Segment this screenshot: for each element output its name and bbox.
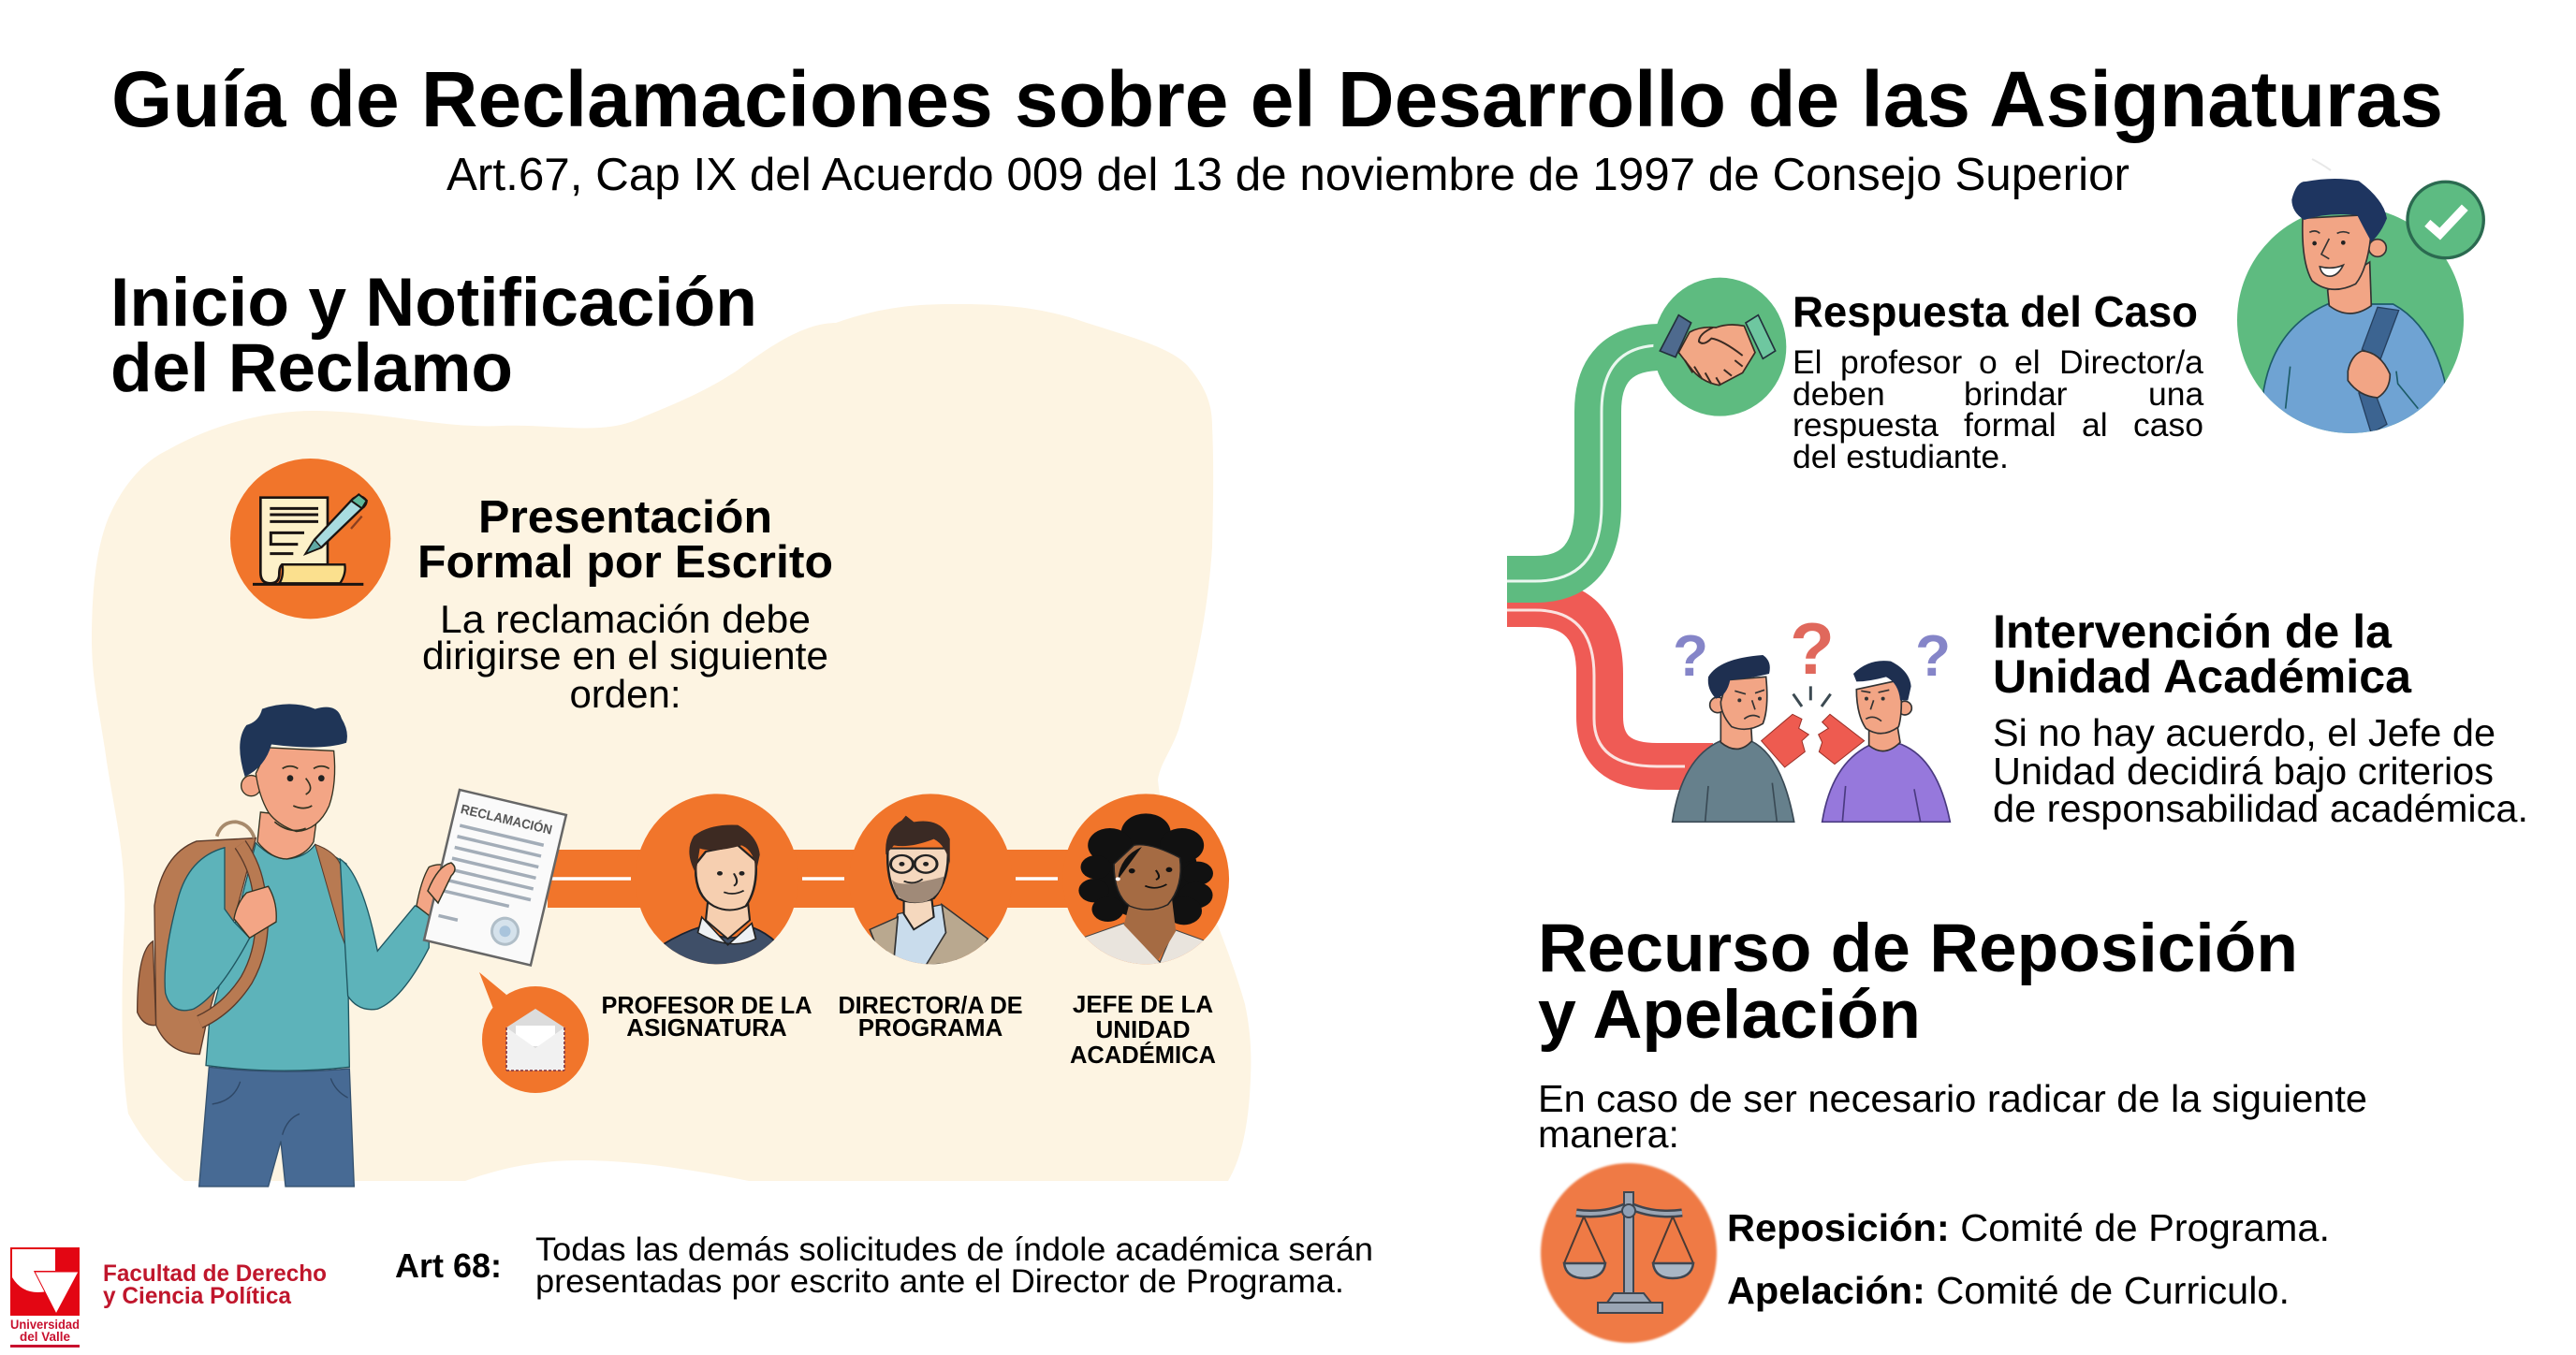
label: jefe: UNIDAD	[1095, 1015, 1191, 1043]
hand holding document	[417, 865, 451, 915]
icon: written document and pen	[230, 459, 390, 619]
reclamation document	[424, 790, 566, 965]
text: orden de la reclamación: dirigirse en el siguiente	[422, 634, 828, 678]
branching path: red route	[1507, 604, 1713, 766]
student with check mark	[2237, 159, 2483, 440]
section heading: recurso: Recurso de Reposición	[1538, 911, 2298, 986]
cream background blob	[92, 304, 1251, 1181]
heading: intervención	[1993, 605, 2412, 703]
text: orden de la reclamación	[422, 597, 828, 716]
speech shards	[1762, 714, 1865, 767]
text: instrucción	[1538, 1077, 2367, 1156]
section heading: inicio y notificación: del Reclamo	[110, 330, 513, 406]
text: respuesta: El	[1793, 343, 1822, 381]
text: respuesta: el	[2014, 343, 2041, 381]
heading: intervención: Intervención de la	[1993, 605, 2393, 658]
text: respuesta: o	[1979, 343, 1998, 381]
icon: envelope speech bubble	[479, 972, 589, 1093]
article 68 text: presentadas por escrito ante el Director de Programa.	[535, 1263, 1344, 1300]
conflict sparks	[1793, 686, 1831, 707]
icon: head of unit	[1062, 794, 1229, 967]
faculty name: Facultad de Derecho	[103, 1260, 327, 1287]
faculty name: y Ciencia Política	[103, 1283, 292, 1309]
question marks	[1673, 607, 1951, 690]
hair	[240, 704, 347, 777]
section heading: recurso	[1538, 911, 2298, 1053]
section heading: recurso: y Apelación	[1538, 977, 1921, 1053]
text: instrucción: manera:	[1538, 1113, 1679, 1156]
label: jefe: ACADÉMICA	[1070, 1041, 1216, 1069]
label: profesor: ASIGNATURA	[626, 1013, 787, 1042]
text: intervención: Si no hay acuerdo, el Jefe de	[1993, 711, 2496, 754]
heading: presentación formal: Formal por Escrito	[417, 537, 833, 588]
label: jefe: JEFE DE LA	[1073, 990, 1213, 1018]
text: intervención: de responsabilidad académica.	[1993, 787, 2528, 830]
right arm	[340, 859, 429, 1010]
student holding document	[138, 704, 451, 1187]
left sleeve	[165, 848, 250, 1011]
finger over document	[428, 863, 455, 903]
logo: Universidad del Valle: Universidad	[10, 1318, 80, 1332]
illustration: two people disagreeing	[1673, 655, 1950, 822]
article 68 text	[535, 1231, 1373, 1300]
sweater	[206, 843, 349, 1071]
label: profesor: PROFESOR DE LA	[601, 991, 812, 1019]
text: orden de la reclamación: La reclamación debe	[440, 597, 811, 641]
text: respuesta: respuesta	[1793, 406, 1939, 444]
text: instrucción: En caso de ser necesario radicar de la siguiente	[1538, 1077, 2367, 1120]
text: respuesta: una	[2148, 375, 2203, 413]
label: profesor	[601, 991, 812, 1042]
branching path: green route	[1507, 345, 1676, 581]
label: jefe	[1070, 990, 1216, 1069]
right person	[1822, 661, 1950, 822]
face	[242, 748, 335, 832]
label: director: DIRECTOR/A DE	[839, 991, 1022, 1019]
heading: presentación formal: Presentación	[478, 492, 772, 543]
backpack	[138, 822, 256, 1055]
text: respuesta: brindar	[1964, 375, 2068, 413]
jeans	[199, 1067, 354, 1187]
icon: handshake	[1653, 278, 1786, 416]
heading: presentación formal	[417, 492, 833, 588]
label: director: PROGRAMA	[858, 1013, 1003, 1042]
text: apelación: Apelación: Comité de Curriculo.	[1727, 1269, 2290, 1312]
text: orden de la reclamación: orden:	[569, 672, 681, 716]
text: intervención	[1993, 711, 2528, 830]
text: respuesta	[1793, 343, 2203, 475]
portraits row	[636, 794, 1229, 967]
article 68 label: Art 68:	[395, 1246, 502, 1285]
text: respuesta: formal	[1964, 406, 2056, 444]
faculty name	[103, 1260, 327, 1309]
orange connector band	[548, 850, 1119, 908]
text: respuesta: caso	[2133, 406, 2203, 444]
icon: scales of justice	[1541, 1163, 1717, 1343]
section heading: inicio y notificación	[110, 265, 757, 406]
neck	[257, 812, 316, 859]
reclamation document: RECLAMACIÓN	[460, 800, 554, 838]
text: reposición: Reposición: Comité de Programa.	[1727, 1206, 2330, 1249]
text: respuesta: profesor	[1840, 343, 1962, 381]
text: intervención: Unidad decidirá bajo criterios	[1993, 750, 2494, 793]
text: respuesta: Director/a	[2059, 343, 2203, 381]
check badge	[2408, 182, 2483, 258]
text: respuesta: deben	[1793, 375, 1885, 413]
backpack straps	[199, 844, 351, 1022]
text: respuesta: al	[2082, 406, 2108, 444]
heading: respuesta del caso: Respuesta del Caso	[1793, 287, 2198, 336]
logo: Universidad del Valle	[10, 1247, 80, 1348]
article 68 text: Todas las demás solicitudes de índole académica serán	[535, 1231, 1373, 1268]
heading: intervención: Unidad Académica	[1993, 650, 2412, 703]
icon: director	[849, 794, 1012, 966]
subtitle: Art.67, Cap IX del Acuerdo 009 del 13 de noviembre de 1997 de Consejo Superior	[446, 150, 2130, 200]
text: respuesta: del estudiante.	[1793, 438, 2009, 475]
title: Guía de Reclamaciones sobre el Desarrollo de las Asignaturas	[111, 55, 2443, 143]
icon: professor	[636, 794, 798, 966]
question marks: ?	[1915, 624, 1951, 689]
logo: Universidad del Valle: del Valle	[20, 1330, 71, 1344]
section heading: inicio y notificación: Inicio y Notificación	[110, 265, 757, 341]
faint arc	[2312, 159, 2331, 170]
label: director	[839, 991, 1022, 1042]
question marks: ?	[1790, 607, 1835, 690]
hand on strap	[234, 886, 276, 938]
question marks: ?	[1673, 624, 1708, 689]
left person	[1673, 655, 1794, 822]
